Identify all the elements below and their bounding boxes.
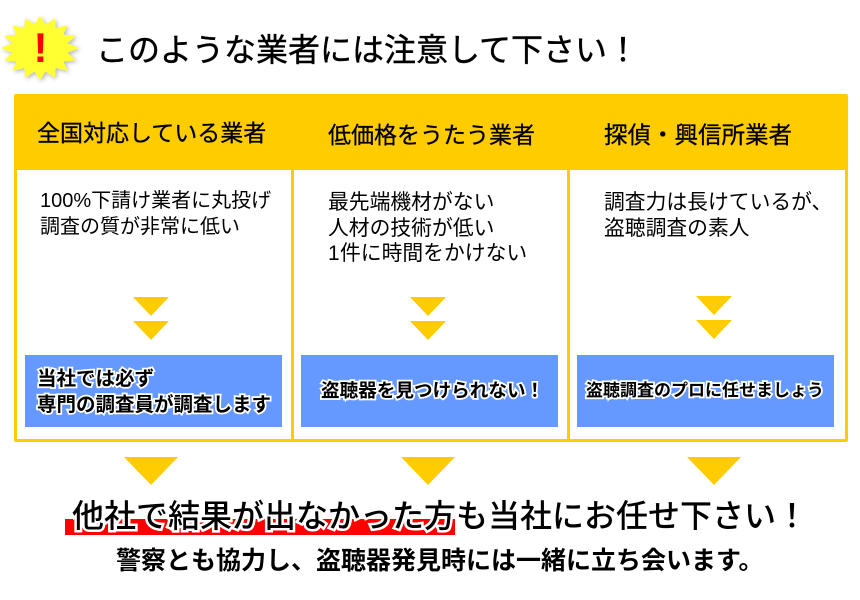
text: column 2: 件に時間をかけない <box>340 242 527 265</box>
arrow: bottom column 2 <box>401 457 455 485</box>
text: column 2 <box>328 191 527 265</box>
panel: comparison table <box>14 94 848 442</box>
icon: warning starburst <box>1 16 80 82</box>
heading: column 1: 全国対応している業者 <box>37 120 266 146</box>
text: column 1: 調査の質が非常に低い <box>40 216 240 238</box>
heading: column 2: 低価格をうたう業者 <box>328 122 535 148</box>
text: column 2: 人材の技術が低い <box>328 216 494 240</box>
callout text: column 1: 当社では必ず <box>37 368 154 390</box>
column divider 1 <box>291 169 294 439</box>
column divider 2 <box>567 169 570 439</box>
text: column 3: 調査力は長けているが、 <box>604 191 832 214</box>
highlight bar <box>65 519 455 535</box>
callout text: column 3: 盗聴調査のプロに任せましょう <box>586 381 824 400</box>
callout text: column 1: 専門の調査員が調査します <box>37 394 271 416</box>
title: このような業者には注意して下さい！ <box>96 32 639 68</box>
arrow: bottom column 1 <box>124 457 178 485</box>
text: column 1 <box>40 190 271 238</box>
heading: column 3: 探偵・興信所業者 <box>604 122 792 148</box>
arrow: bottom column 3 <box>687 457 741 485</box>
callout: column 1 <box>25 355 282 427</box>
text: column 3: 盗聴調査の素人 <box>604 216 750 240</box>
text: column 2: 最先端機材がない <box>328 191 494 214</box>
arrow: column 1 lower <box>133 321 169 340</box>
arrow: column 2 upper <box>410 297 446 316</box>
callout: column 3 <box>577 355 834 427</box>
table header band <box>17 97 845 170</box>
text: column 1: 100%下請け業者に丸投げ <box>40 190 271 212</box>
arrow: column 3 lower <box>696 320 732 339</box>
arrow: column 3 upper <box>696 296 732 315</box>
text: column 3 <box>604 191 832 240</box>
closing subtext: 警察とも協力し、盗聴器発見時には一緒に立ち会います。 <box>116 547 764 575</box>
closing headline: 他社で結果が出なかった方も当社にお任せ下さい！ <box>72 498 808 534</box>
callout text: column 1 <box>36 366 272 416</box>
icon: warning starburst: ! <box>34 24 48 71</box>
text: column 2: 1 <box>328 242 340 265</box>
arrow: column 1 upper <box>133 297 169 316</box>
arrow: column 2 lower <box>410 321 446 340</box>
callout text: column 2: 盗聴器を見つけられない！ <box>321 380 544 401</box>
callout: column 2 <box>301 355 558 427</box>
